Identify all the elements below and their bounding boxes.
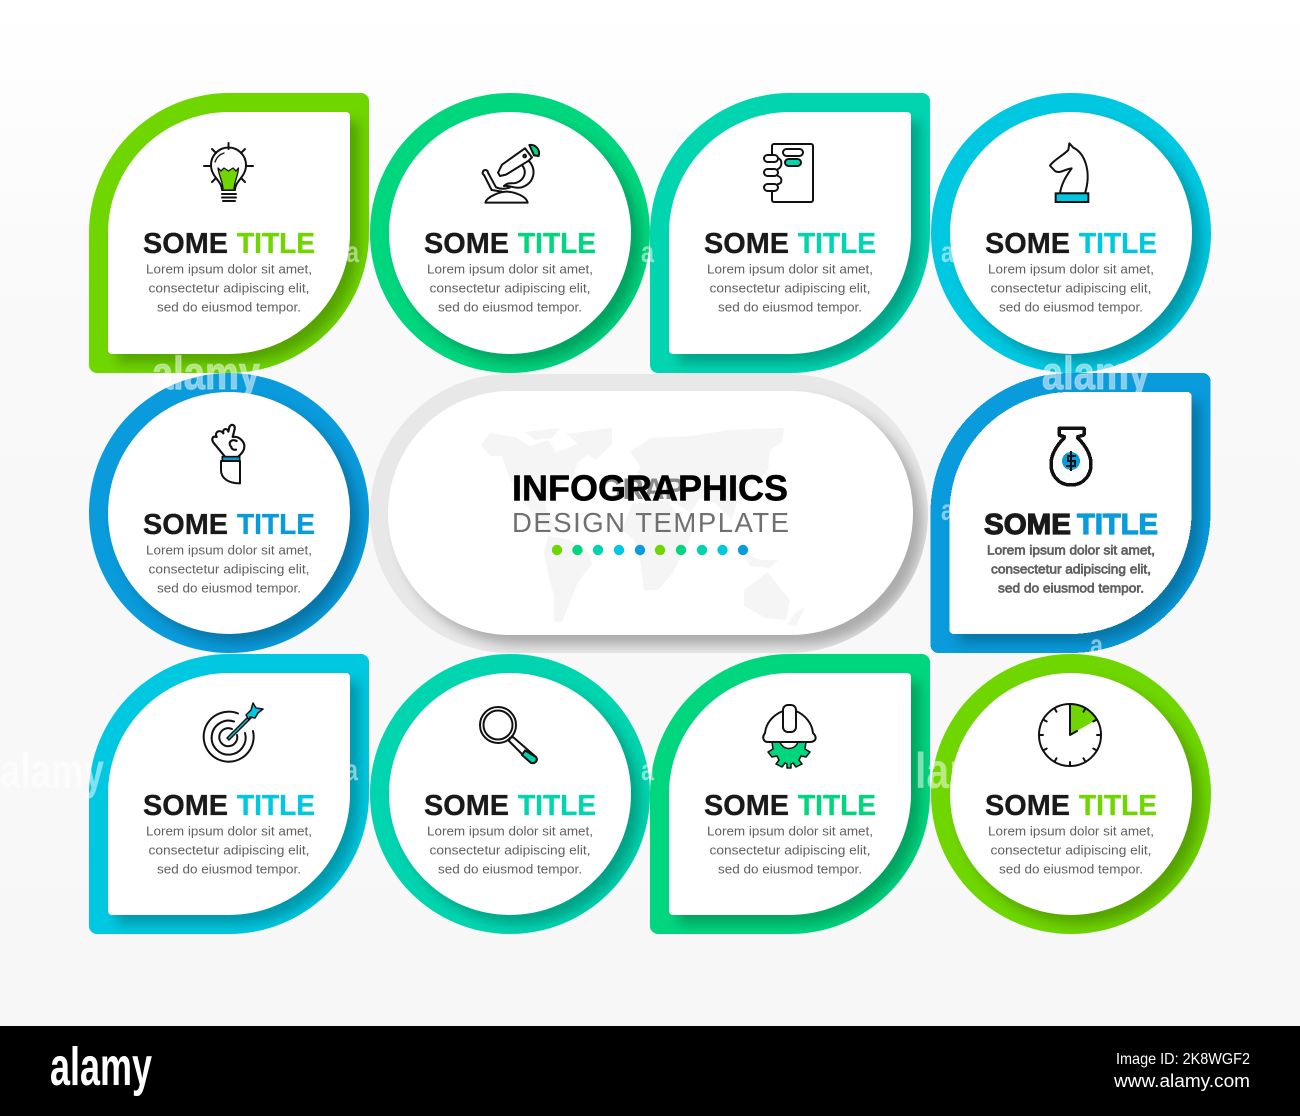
- panel: card 10 time: [931, 654, 1211, 934]
- body text: [427, 824, 593, 876]
- title: [985, 228, 1157, 260]
- title: TITLE: [518, 228, 596, 260]
- title: SOME: [143, 228, 228, 260]
- panel: card 9 engineering: [650, 654, 930, 934]
- ring frame: [370, 654, 650, 934]
- subheading: DESIGN TEMPLATE: [512, 507, 789, 538]
- pill ring: [370, 374, 928, 653]
- leaf frame: [89, 93, 369, 373]
- body text: sed do eiusmod tempor.: [999, 300, 1143, 314]
- icon: target with arrow: [204, 703, 263, 762]
- panel: card 7 target: [89, 654, 369, 934]
- watermarks: a: [941, 494, 954, 527]
- title: TITLE: [798, 790, 876, 822]
- watermarks: a: [346, 236, 359, 269]
- body text: consectetur adipiscing elit,: [710, 280, 870, 296]
- title: [424, 228, 596, 260]
- title: SOME: [143, 509, 228, 541]
- icon: magnifier: [480, 707, 537, 763]
- ring frame: [931, 93, 1211, 373]
- alamy logo: alamy: [50, 1037, 152, 1097]
- leaf frame: [650, 93, 930, 373]
- icon: clock: [1039, 704, 1101, 766]
- icon: OK hand: [212, 425, 244, 483]
- title: SOME: [704, 790, 789, 822]
- body text: consectetur adipiscing elit,: [710, 842, 870, 858]
- body text: sed do eiusmod tempor.: [718, 300, 862, 314]
- title: SOME: [985, 790, 1070, 822]
- watermarks: alamy: [1042, 347, 1150, 399]
- body text: consectetur adipiscing elit,: [991, 562, 1151, 576]
- body text: consectetur adipiscing elit,: [148, 280, 310, 296]
- body text: [146, 262, 312, 314]
- body text: consectetur adipiscing elit,: [148, 842, 310, 858]
- watermarks: alamy: [0, 743, 104, 799]
- body text: sed do eiusmod tempor.: [998, 580, 1144, 596]
- image id: Image ID: 2K8WGF2: [1116, 1051, 1250, 1068]
- heading: INFOGRAPHICS: [512, 468, 788, 508]
- body text: [427, 262, 593, 314]
- title: SOME: [424, 790, 509, 822]
- title: TITLE: [1079, 790, 1157, 822]
- watermarks: [0, 236, 1150, 799]
- panel: card 5 quality: [89, 373, 369, 653]
- leaf frame: [930, 373, 1210, 653]
- title: TITLE: [1077, 509, 1158, 541]
- body text: Lorem ipsum dolor sit amet,: [707, 262, 873, 276]
- icon: money bag: [1051, 428, 1091, 485]
- body text: sed do eiusmod tempor.: [157, 580, 301, 596]
- body text: [146, 542, 312, 596]
- watermarks: a: [941, 236, 954, 269]
- body text: [707, 262, 873, 314]
- body text: [707, 824, 873, 876]
- body text: sed do eiusmod tempor.: [438, 862, 582, 876]
- body text: Lorem ipsum dolor sit amet,: [988, 262, 1154, 276]
- icon: light bulb: [204, 143, 253, 201]
- title: TITLE: [518, 790, 596, 822]
- body text: sed do eiusmod tempor.: [718, 862, 862, 876]
- body text: Lorem ipsum dolor sit amet,: [427, 824, 593, 838]
- body text: [988, 824, 1154, 876]
- body text: Lorem ipsum dolor sit amet,: [146, 262, 312, 276]
- panel: card 6 money: [930, 373, 1210, 653]
- watermarks: a: [345, 754, 358, 787]
- panel: card 2 research: [370, 93, 650, 373]
- watermarks: lar: [915, 743, 965, 799]
- icon: helmet and gear: [763, 705, 816, 768]
- title: SOME: [704, 228, 789, 260]
- title: TITLE: [798, 228, 876, 260]
- footer band: [0, 1026, 1300, 1116]
- title: TITLE: [237, 228, 315, 260]
- watermarks: a: [1090, 629, 1103, 662]
- ring frame: [370, 93, 650, 373]
- body text: Lorem ipsum dolor sit amet,: [427, 262, 593, 276]
- icon: microscope: [483, 145, 539, 203]
- icon: notebook: [764, 144, 813, 202]
- website: www.alamy.com: [1113, 1071, 1250, 1091]
- body text: Lorem ipsum dolor sit amet,: [987, 542, 1155, 558]
- watermarks: a: [641, 236, 654, 269]
- title: [143, 509, 315, 541]
- title: TITLE: [1079, 228, 1157, 260]
- watermarks: alamy: [152, 347, 260, 399]
- title: [704, 790, 876, 822]
- body text: consectetur adipiscing elit,: [990, 280, 1152, 296]
- title: SOME: [984, 509, 1071, 541]
- ring frame: [89, 373, 369, 653]
- body text: consectetur adipiscing elit,: [148, 562, 310, 576]
- body text: Lorem ipsum dolor sit amet,: [988, 824, 1154, 838]
- title: [704, 228, 876, 260]
- ring frame: [931, 654, 1211, 934]
- panel: card 4 strategy: [931, 93, 1211, 373]
- title: [985, 790, 1157, 822]
- body text: consectetur adipiscing elit,: [430, 280, 590, 296]
- body text: consectetur adipiscing elit,: [430, 842, 590, 858]
- title: TITLE: [237, 790, 315, 822]
- title: SOME: [424, 228, 509, 260]
- body text: sed do eiusmod tempor.: [157, 862, 301, 876]
- body text: Lorem ipsum dolor sit amet,: [146, 542, 312, 558]
- body text: [987, 542, 1155, 596]
- panel: card 3 notes: [650, 93, 930, 373]
- body text: Lorem ipsum dolor sit amet,: [707, 824, 873, 838]
- leaf frame: [89, 654, 369, 934]
- colour dots: [552, 545, 748, 555]
- body text: consectetur adipiscing elit,: [990, 842, 1152, 858]
- title: [424, 790, 596, 822]
- pill face: [388, 391, 913, 635]
- watermarks: a: [641, 754, 654, 787]
- title: SOME: [143, 790, 228, 822]
- world map: [481, 428, 805, 626]
- ghost watermark: GRAP: [600, 473, 684, 506]
- panel: center pill: [370, 374, 928, 653]
- title: [984, 509, 1158, 541]
- body text: Lorem ipsum dolor sit amet,: [146, 824, 312, 838]
- panel: card 8 search: [370, 654, 650, 934]
- body text: sed do eiusmod tempor.: [999, 862, 1143, 876]
- title: [143, 228, 315, 260]
- title: TITLE: [237, 509, 315, 541]
- body text: sed do eiusmod tempor.: [438, 300, 582, 314]
- title: SOME: [985, 228, 1070, 260]
- body text: [146, 824, 312, 876]
- panel: card 1 idea: [89, 93, 369, 373]
- leaf frame: [650, 654, 930, 934]
- body text: sed do eiusmod tempor.: [157, 300, 301, 314]
- body text: [988, 262, 1154, 314]
- icon: chess knight: [1050, 143, 1088, 202]
- title: [143, 790, 315, 822]
